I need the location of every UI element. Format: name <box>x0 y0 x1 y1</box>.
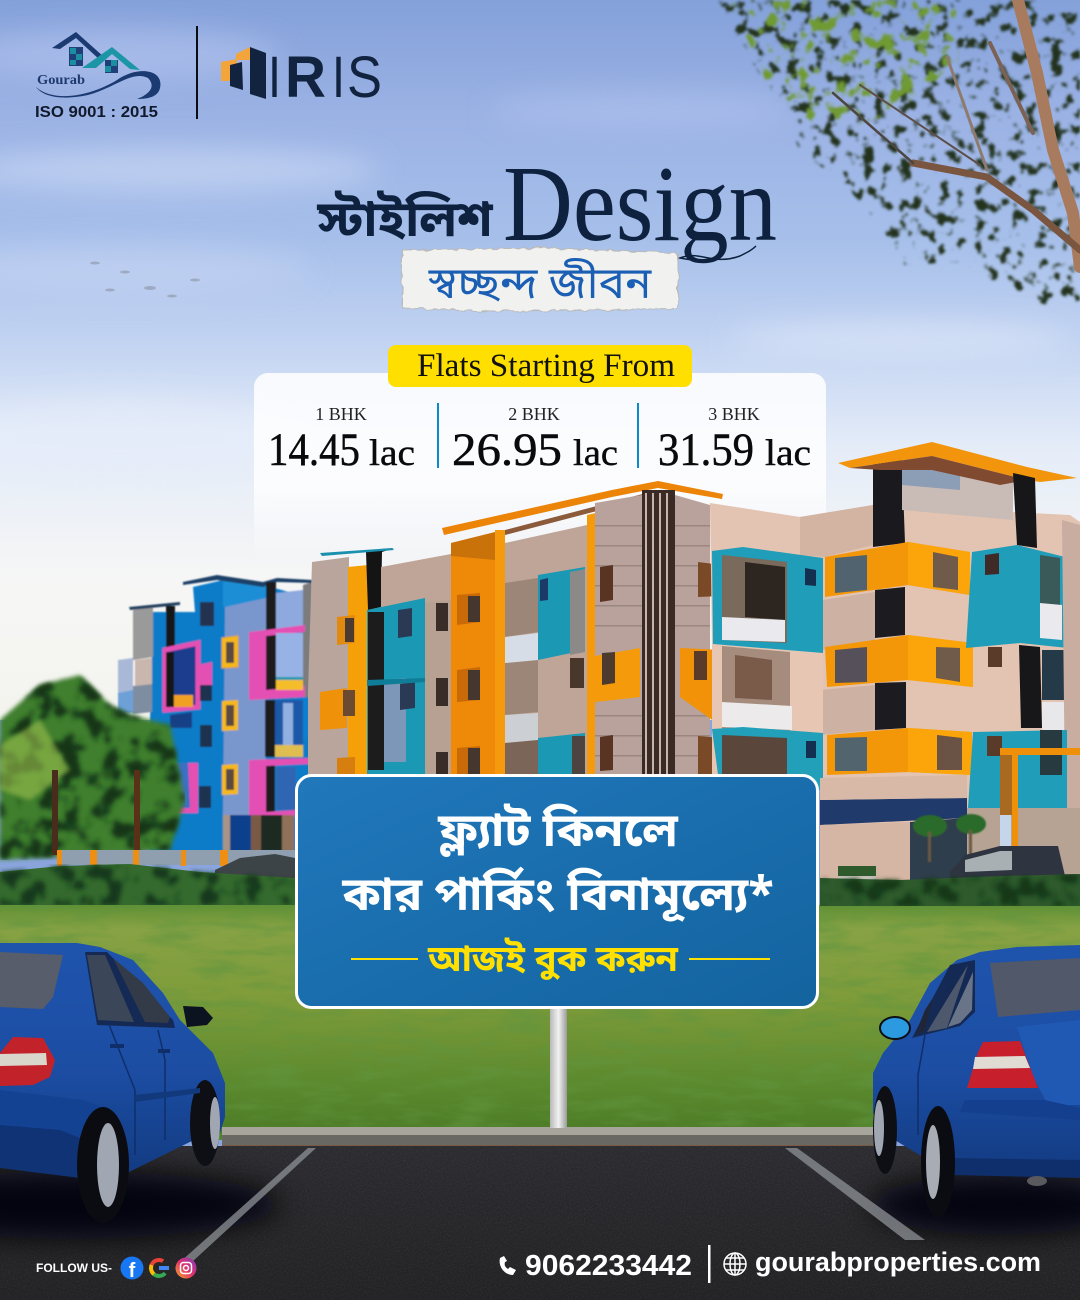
logo: Gourab: ISO 9001 : 2015 <box>35 104 158 121</box>
wall and parked car behind hedge <box>57 850 295 880</box>
tree top right <box>715 0 1080 310</box>
headline: স্টাইলিশ <box>316 190 493 257</box>
icon: palms <box>913 814 986 862</box>
logo: Iris <box>221 45 382 110</box>
logo: Iris: S <box>347 45 382 110</box>
billboard: free car parking: কার পার্কিং বিনামূল্যে* <box>341 866 774 930</box>
follow us <box>36 1256 196 1282</box>
price: 3 BHK: 3 BHK <box>708 404 760 424</box>
contact: phone: 9062233442 <box>525 1250 692 1282</box>
price: 2 BHK <box>452 404 618 476</box>
billboard: free car parking: আজই বুক করুন <box>427 938 679 986</box>
torn paper strip: স্বচ্ছন্দ জীবন <box>428 257 652 316</box>
icon: phone <box>500 1256 516 1275</box>
hedges <box>0 864 1080 906</box>
building: centre striped tower <box>595 490 722 775</box>
logo divider <box>196 26 198 119</box>
car: left <box>0 943 225 1223</box>
asphalt <box>0 1146 1080 1300</box>
car: right <box>873 945 1080 1218</box>
icon: google <box>148 1257 170 1279</box>
logo: Gourab <box>35 32 160 121</box>
icon: facebook <box>120 1256 144 1282</box>
billboard: free car parking: ফ্ল্যাট কিনলে <box>437 802 679 866</box>
parked car and planter <box>838 846 1066 884</box>
icon: facebook: f <box>129 1260 136 1282</box>
logo: Iris: R <box>285 45 326 110</box>
price: 2 BHK: 2 BHK <box>508 404 560 424</box>
price: 3 BHK: 31.59 <box>658 424 754 476</box>
headline <box>316 145 777 264</box>
price: 3 BHK: lac <box>765 433 811 474</box>
price: 1 BHK: lac <box>369 433 415 474</box>
price: 1 BHK: 14.45 <box>268 424 360 476</box>
price: 1 BHK <box>268 404 415 476</box>
building: centre orange block <box>308 481 723 775</box>
sky background <box>0 0 1080 720</box>
billboard: free car parking <box>296 776 818 1008</box>
price: 2 BHK: 26.95 <box>452 424 562 476</box>
badge: flats starting from: Flats Starting From <box>417 348 675 384</box>
icon: instagram <box>176 1258 196 1278</box>
logo: Iris: I <box>268 45 281 110</box>
headline: Design <box>503 145 777 264</box>
sign post <box>550 1008 567 1128</box>
contact: website: gourabproperties.com <box>755 1247 1041 1277</box>
price panel backdrop <box>254 373 826 560</box>
price: 3 BHK <box>658 404 811 476</box>
building: right block <box>710 442 1080 890</box>
price: 2 BHK: lac <box>573 433 618 474</box>
logo: Gourab: Gourab <box>37 73 85 88</box>
lawn <box>0 905 1080 1140</box>
icon: globe <box>724 1253 746 1275</box>
torn paper strip <box>402 248 678 316</box>
kerb <box>222 1127 876 1147</box>
building: left blue block <box>118 575 318 860</box>
logo: Iris: I <box>332 45 345 110</box>
price: 1 BHK: 1 BHK <box>315 404 367 424</box>
trees left <box>0 675 185 860</box>
follow us: FOLLOW US- <box>36 1261 112 1275</box>
parking lines <box>180 1148 925 1262</box>
